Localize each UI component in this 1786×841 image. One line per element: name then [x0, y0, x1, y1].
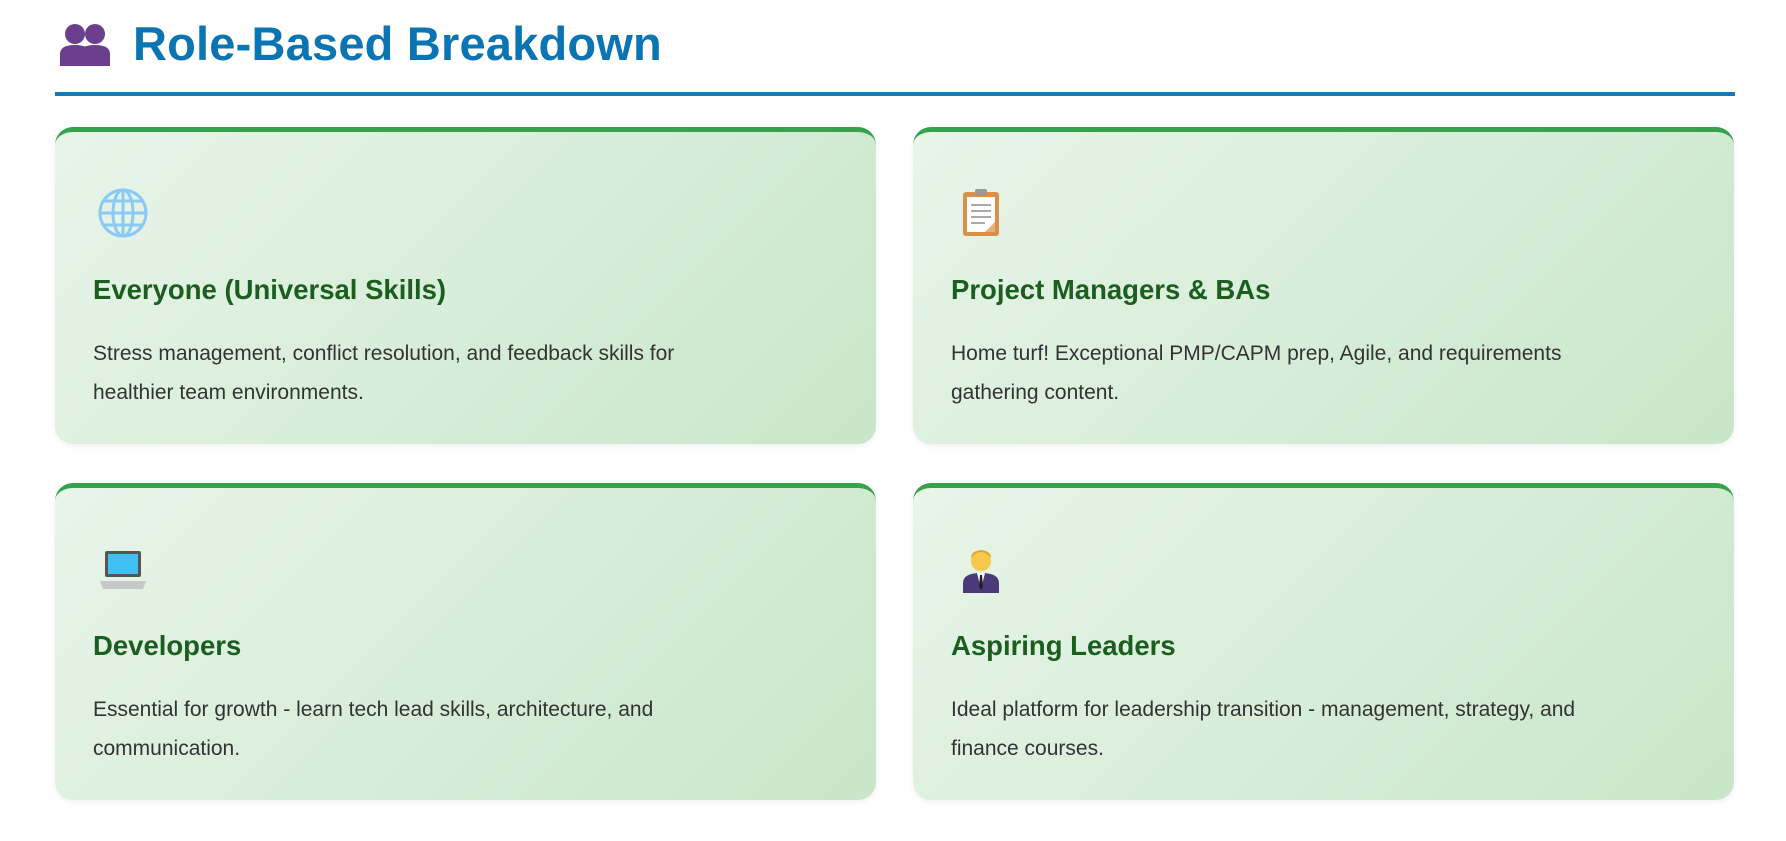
- icon: globe: [98, 188, 148, 238]
- heading: Everyone (Universal Skills): [93, 274, 446, 305]
- icon: clipboard: [963, 189, 999, 236]
- text: Ideal platform for leadership transition - management, strategy, and finance courses.: [951, 698, 1575, 760]
- icon: laptop: [100, 551, 146, 589]
- panel: developers: [55, 483, 876, 800]
- heading: Project Managers & BAs: [951, 274, 1270, 305]
- title: Role-Based Breakdown: [133, 16, 662, 70]
- panel: everyone: [55, 127, 876, 444]
- icon: people: [60, 24, 110, 66]
- text: Essential for growth - learn tech lead skills, architecture, and communication.: [93, 698, 653, 760]
- panel: project managers: [913, 127, 1734, 444]
- icon: businessperson: [963, 550, 999, 593]
- heading: Aspiring Leaders: [951, 630, 1176, 661]
- text: Home turf! Exceptional PMP/CAPM prep, Agile, and requirements gathering content.: [951, 342, 1561, 404]
- text: Stress management, conflict resolution, and feedback skills for healthier team environments.: [93, 342, 674, 404]
- panel: aspiring leaders: [913, 483, 1734, 800]
- heading: Developers: [93, 630, 241, 661]
